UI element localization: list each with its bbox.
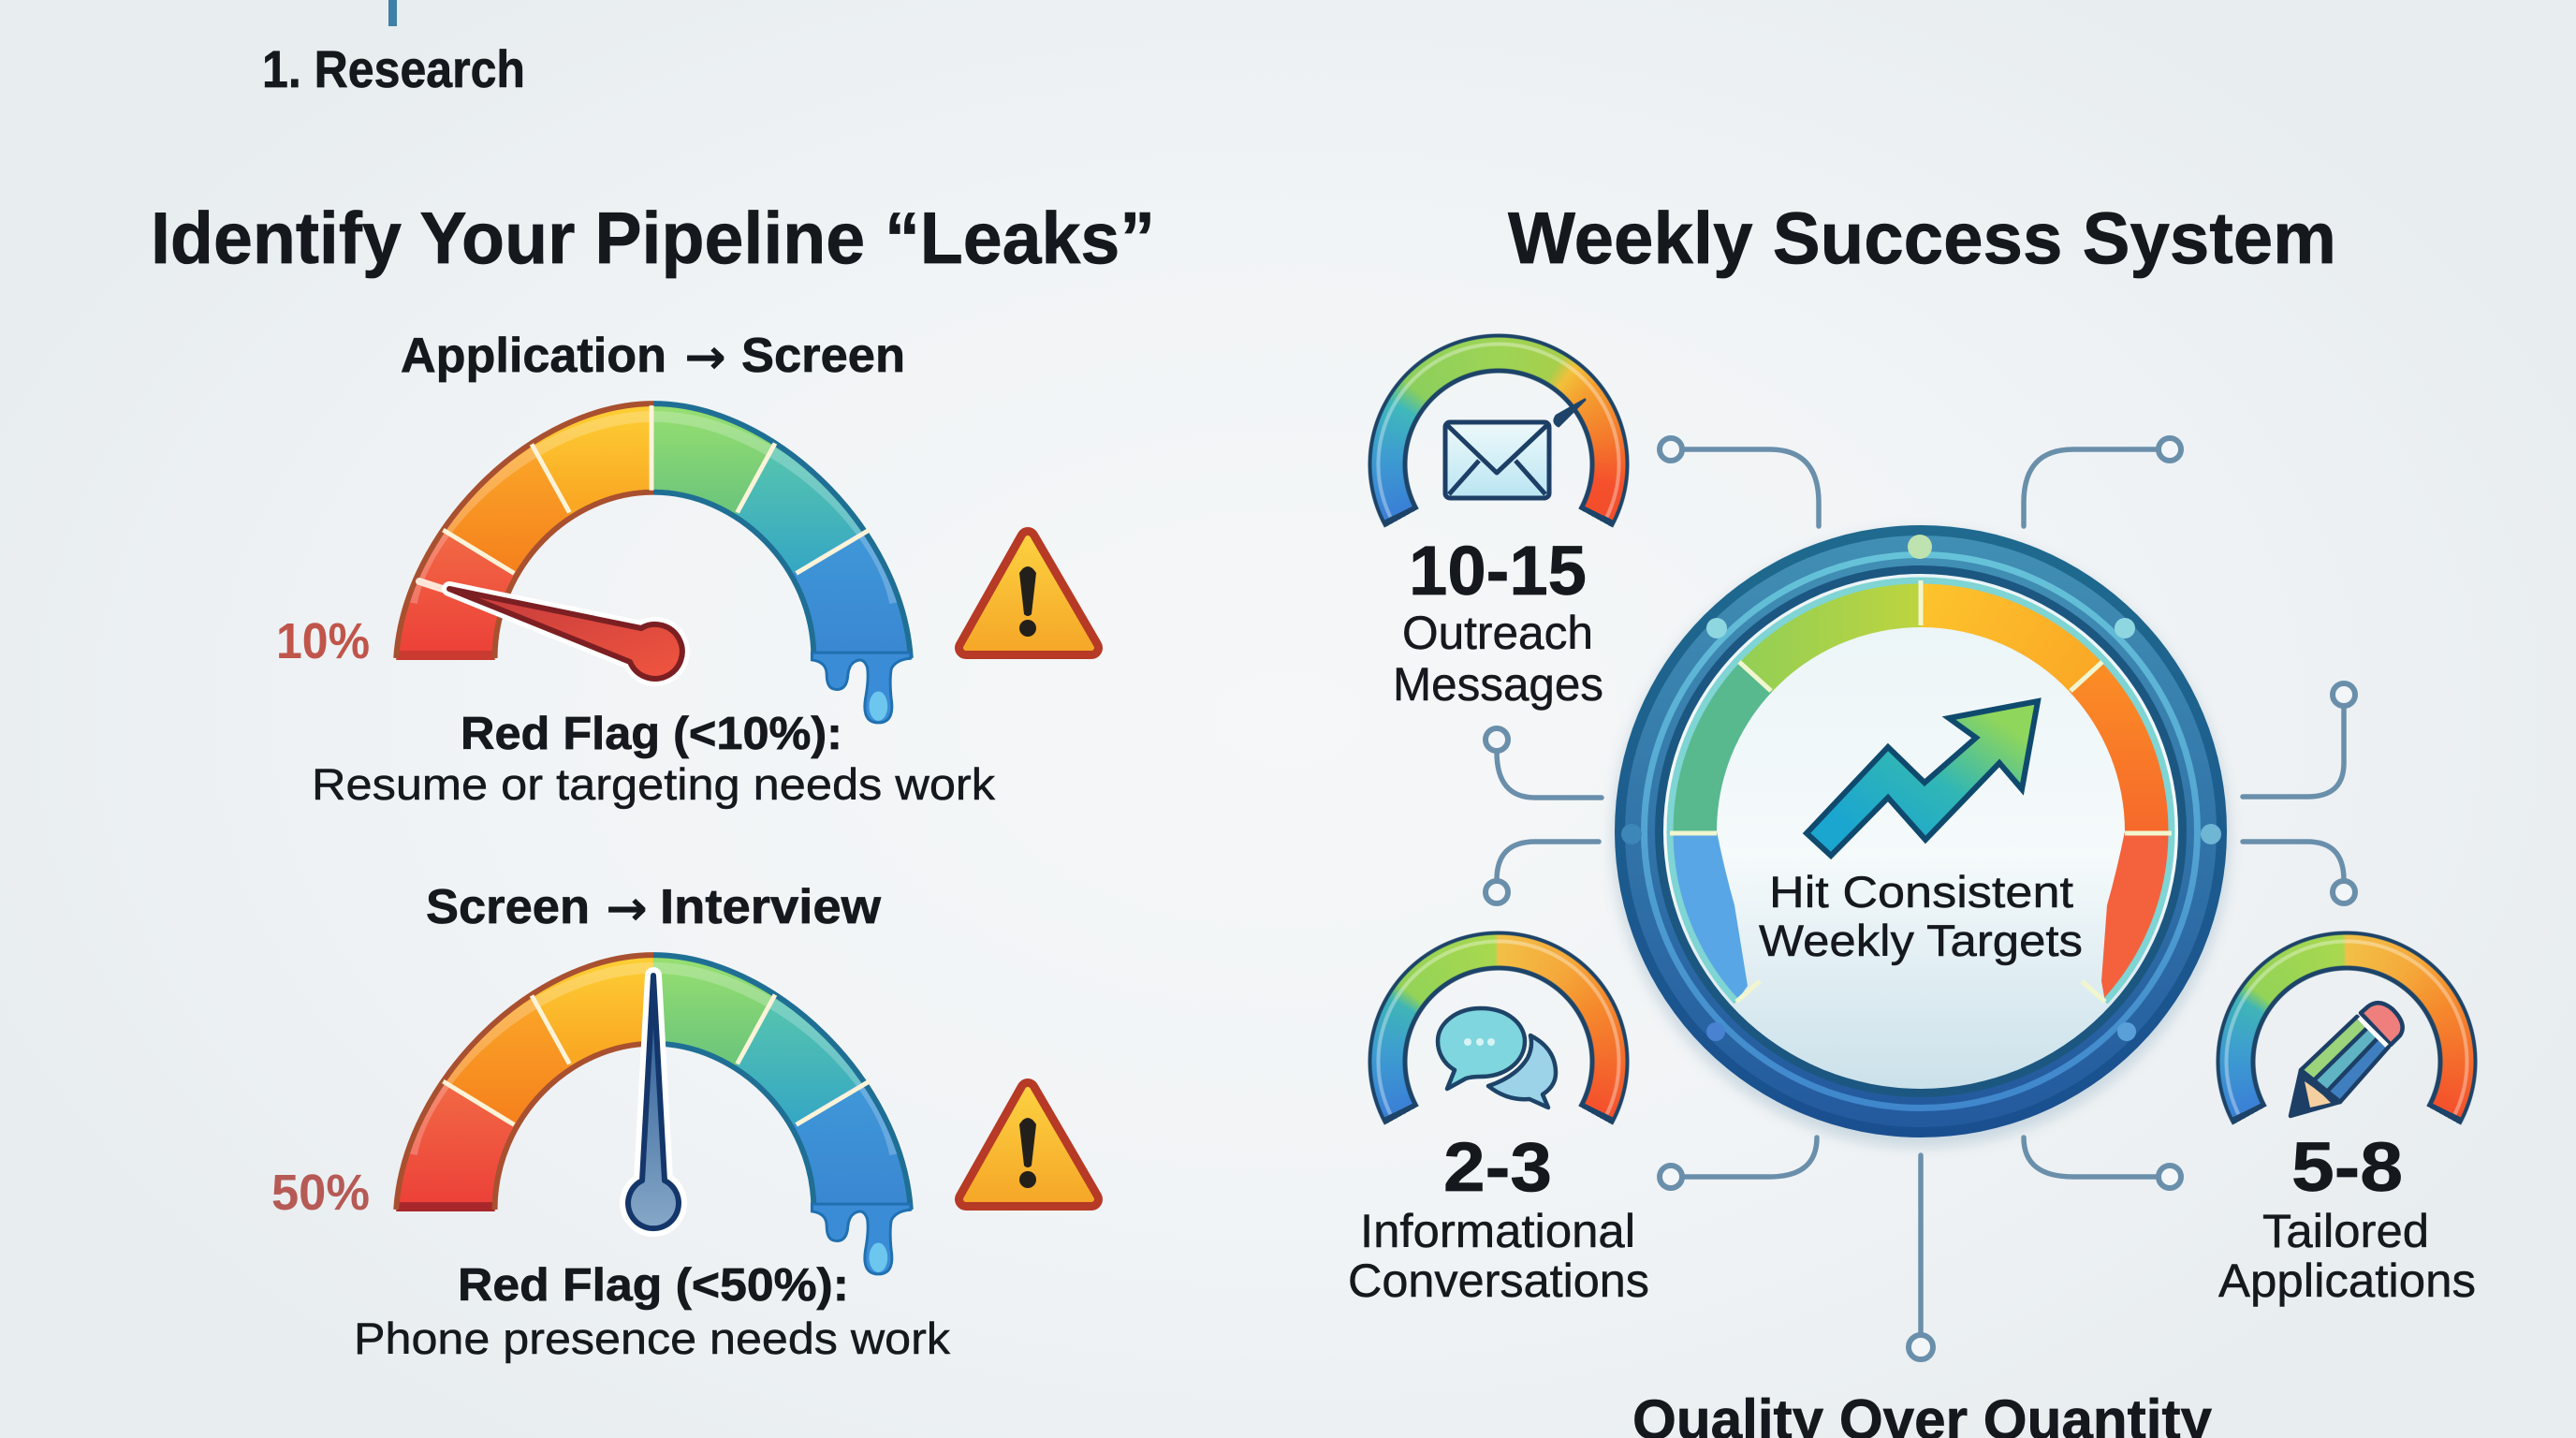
target: outreach messages: Outreach xyxy=(1402,607,1593,659)
target: informational conversations: 2-3 xyxy=(1443,1128,1552,1206)
subheading: Screen to Interview: Interview xyxy=(660,880,882,934)
dial caption xyxy=(1759,867,2083,965)
needle at 50 percent xyxy=(628,976,679,1228)
target: informational conversations: Informational xyxy=(1360,1205,1635,1257)
small gauge: outreach messages with envelope xyxy=(1368,333,1630,528)
value label 50%: 50% xyxy=(271,1165,370,1221)
red flag text: below 10 percent: Red Flag (<10%): xyxy=(461,709,842,759)
target: tailored applications xyxy=(2218,1128,2476,1307)
step label text: 1. Research xyxy=(262,39,525,98)
needle at 10 percent xyxy=(419,581,682,679)
target: tailored applications: Tailored xyxy=(2262,1205,2429,1257)
icon: warning triangle xyxy=(966,1090,1091,1199)
leak drips xyxy=(812,653,911,723)
icon: back chat bubble xyxy=(1488,1035,1556,1108)
red flag text: below 10 percent xyxy=(312,709,996,809)
central dial: hit consistent weekly targets xyxy=(1612,525,2230,1148)
subheading: Application to Screen: Screen xyxy=(741,329,905,383)
small gauge: informational conversations with chat bubbles xyxy=(1368,931,1630,1125)
panel: pipeline leaks xyxy=(151,197,1155,1363)
red flag text: below 50 percent: Phone presence needs work xyxy=(354,1313,951,1363)
target: tailored applications: 5-8 xyxy=(2291,1128,2403,1206)
dial caption: Weekly Targets xyxy=(1759,916,2083,965)
dial sectors xyxy=(1670,580,2172,1002)
connector lines xyxy=(1486,438,2355,1359)
subheading: Application to Screen: → xyxy=(684,330,726,386)
value label 10%: 10% xyxy=(276,613,370,669)
gauge: screen to interview xyxy=(393,952,914,1275)
icon: warning triangle xyxy=(966,538,1091,648)
target: informational conversations xyxy=(1348,1128,1649,1307)
connector tick xyxy=(388,0,397,26)
dial caption: Hit Consistent xyxy=(1769,867,2073,917)
subheading: Screen to Interview: Screen xyxy=(426,880,590,934)
icon: front chat bubble xyxy=(1438,1008,1525,1089)
leak drips xyxy=(812,1204,911,1274)
panel: weekly success system xyxy=(1348,197,2476,1438)
subheading: Application to Screen: Application xyxy=(401,329,666,383)
subheading: Application to Screen xyxy=(401,329,905,386)
red flag text: below 10 percent: Resume or targeting needs work xyxy=(312,759,996,809)
subheading: Screen to Interview: → xyxy=(606,881,648,937)
gauge: application to screen xyxy=(393,401,914,725)
typing dots xyxy=(1464,1038,1495,1046)
icon: pencil xyxy=(2291,1003,2403,1116)
target: outreach messages: Messages xyxy=(1393,658,1603,711)
icon: upward zigzag arrow xyxy=(1807,701,2038,856)
red flag text: below 50 percent xyxy=(354,1260,951,1363)
ring markers xyxy=(1621,535,2221,1041)
heading: Weekly Success System: Weekly Success System xyxy=(1508,197,2336,279)
target: outreach messages xyxy=(1393,532,1603,711)
target: informational conversations: Conversations xyxy=(1348,1255,1649,1307)
target: tailored applications: Applications xyxy=(2218,1255,2476,1307)
small gauge: tailored applications with pencil xyxy=(2216,931,2478,1125)
subheading: Screen to Interview xyxy=(426,880,882,937)
heading: Identify Your Pipeline Leaks: Identify Your Pipeline “Leaks” xyxy=(151,197,1155,279)
step label: 1. Research xyxy=(262,0,525,98)
red flag text: below 50 percent: Red Flag (<50%): xyxy=(458,1260,849,1311)
gauge needle xyxy=(1555,400,1585,426)
target: outreach messages: 10-15 xyxy=(1409,532,1587,609)
icon: envelope xyxy=(1445,422,1549,498)
